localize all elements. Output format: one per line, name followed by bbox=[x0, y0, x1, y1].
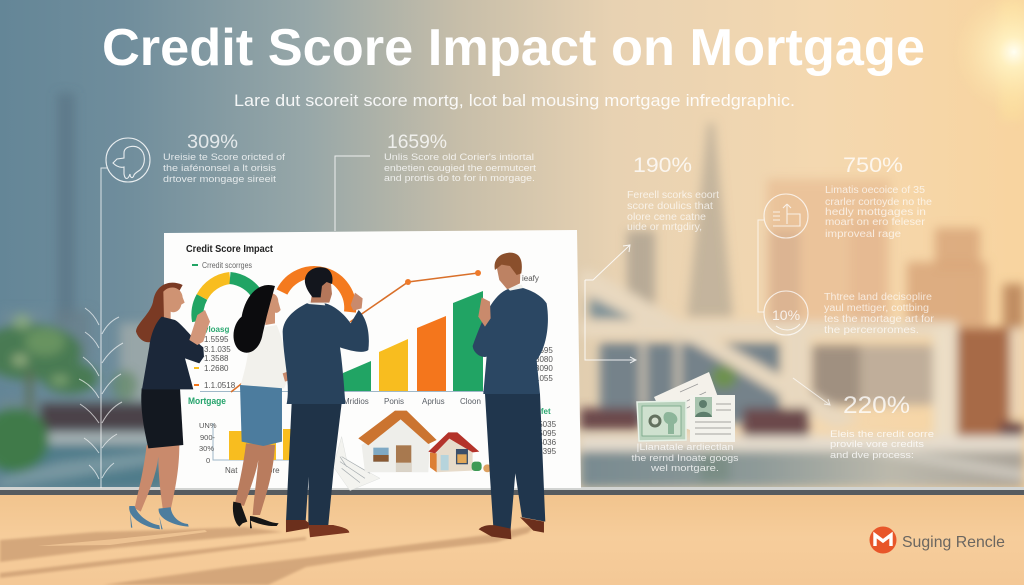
legend: left values: 1.5595 bbox=[204, 335, 229, 344]
icon: 10% circle bbox=[764, 291, 808, 335]
legend: credit scores: Crredit scorrges bbox=[202, 260, 252, 270]
stat: 190%: uide or mrtgdiry, bbox=[627, 222, 702, 233]
legend: right values bbox=[535, 346, 557, 456]
stat: 750%: Limatis oecoice of 35 bbox=[825, 185, 926, 196]
stat: 750%: improveal rage bbox=[825, 229, 902, 240]
icon: documents and cash bbox=[637, 372, 735, 442]
chart: mortgage bars: ore bbox=[268, 466, 280, 475]
jacket bbox=[283, 303, 369, 404]
legs and shoes bbox=[129, 445, 189, 529]
legend: right values: .5036 bbox=[536, 438, 557, 447]
chart labels: ieafy bbox=[522, 274, 539, 283]
text: Three land bbox=[824, 292, 935, 336]
chart labels: Mridios bbox=[343, 397, 369, 406]
face bbox=[163, 287, 185, 319]
panel: whiteboard with charts bbox=[164, 230, 581, 491]
icon: 10% circle: 10% bbox=[772, 307, 800, 323]
stat: 750%: moart on ero feleser bbox=[825, 217, 926, 228]
person: woman in dark jacket bbox=[129, 283, 210, 529]
person: man in navy suit, right bbox=[473, 253, 548, 539]
connector: left timeline with branches bbox=[79, 168, 123, 488]
person: man in navy suit, centre bbox=[283, 267, 369, 537]
hair bbox=[305, 267, 333, 297]
chart: trend line bbox=[231, 270, 481, 392]
subtitle: Lare dut scoreit score mortg, lcot bal mousing mortgage infredgraphic. bbox=[234, 91, 795, 110]
collar bbox=[308, 300, 325, 305]
stat: 220%: and dve process: bbox=[830, 450, 914, 461]
blouse bbox=[241, 325, 290, 388]
text: Three land: yaul mettiger, cottbing bbox=[824, 303, 929, 314]
stat: 1659%: Unlis Score old Corier's intiortal bbox=[384, 152, 534, 163]
stat: 309%: Ureisie te Score oricted of bbox=[163, 152, 285, 163]
skirt bbox=[141, 388, 183, 448]
legs and heels bbox=[233, 443, 279, 528]
trousers and shoes bbox=[479, 393, 545, 539]
legend: right values: .5395 bbox=[536, 447, 557, 456]
icon: head circle bbox=[106, 138, 150, 182]
legend: right values: .5095 bbox=[536, 429, 557, 438]
legend: right values: .5035 bbox=[536, 420, 557, 429]
icon: large house bbox=[358, 411, 437, 472]
title: Credit Score Impact on Mortgage bbox=[102, 19, 925, 77]
legend: right values: ofet bbox=[536, 407, 551, 416]
icons: growth and 10% circles with connector bbox=[758, 194, 808, 335]
legend: left values bbox=[194, 325, 236, 390]
legend: left values: 1.1.0518 bbox=[204, 381, 236, 390]
legend: left values: yloasg bbox=[204, 325, 229, 334]
chart: mortgage bars: UN% bbox=[199, 421, 217, 430]
legend: right values: 3080 bbox=[535, 355, 553, 364]
hands bbox=[189, 310, 210, 345]
chart: mortgage bars: 900- bbox=[200, 433, 216, 442]
caption: documents: wel mortgare. bbox=[650, 463, 719, 474]
legend: left values: 1.2680 bbox=[204, 364, 229, 373]
stat: 190%: Fereell scorks eoort bbox=[627, 190, 719, 201]
icon: growth steps bbox=[764, 194, 808, 238]
jacket bbox=[473, 287, 548, 394]
chart: green yellow gauge bbox=[197, 278, 258, 321]
skirt bbox=[240, 385, 282, 446]
stat: 220%: provile vore credits bbox=[830, 439, 924, 450]
hair bbox=[136, 283, 183, 342]
icon: paper sheet bbox=[333, 437, 380, 491]
hand bbox=[351, 293, 363, 311]
hair bbox=[495, 253, 522, 275]
legend: right values: 5595 bbox=[535, 346, 553, 355]
stat: 1659%: 1659% bbox=[387, 132, 447, 153]
chart labels: Ponis bbox=[384, 397, 404, 406]
stat: 190% bbox=[627, 154, 719, 233]
trousers and shoes bbox=[286, 403, 349, 537]
chart: mortgage bars bbox=[199, 421, 313, 475]
stat: 309% bbox=[106, 132, 285, 185]
stat: 190%: olore cene catne bbox=[627, 212, 707, 223]
face bbox=[265, 293, 281, 325]
arrows from the board to 190% bbox=[585, 245, 636, 363]
stat: 1659%: enbetien cougied the oermutcert bbox=[384, 163, 536, 174]
chart: mortgage bars: Nat bbox=[225, 466, 238, 475]
stat: 190%: score doulics that bbox=[627, 201, 713, 212]
jacket bbox=[142, 317, 204, 389]
stat: 220% bbox=[830, 392, 934, 461]
hand bbox=[478, 297, 491, 327]
legend: right values: 1055 bbox=[535, 374, 553, 383]
stat: 220%: Eleis the credit oorre bbox=[830, 429, 934, 440]
head bbox=[496, 263, 521, 289]
floor with shadows bbox=[0, 487, 1024, 585]
stat: 1659% bbox=[335, 132, 536, 231]
caption: documents: the rernd Inoate googs bbox=[632, 453, 739, 464]
chart: mortgage bars: 0 bbox=[206, 456, 210, 465]
person: woman in white blouse bbox=[233, 285, 292, 528]
collar bbox=[506, 285, 523, 291]
chart: rising bars bbox=[200, 291, 500, 392]
icon: small house bbox=[428, 432, 491, 472]
stat: 750%: 750% bbox=[843, 154, 903, 177]
heading: Mortgage: Mortgage bbox=[188, 396, 226, 406]
legend: right values: 3090 bbox=[535, 364, 553, 373]
hair bbox=[233, 285, 275, 353]
head bbox=[311, 280, 332, 303]
stat: 309%: the iafénonsel a lt orisis bbox=[163, 163, 276, 174]
arrow to 220% bbox=[793, 378, 830, 405]
stat: 309%: drtover mongage sireeit bbox=[163, 174, 276, 185]
chart labels: Aprlus bbox=[422, 397, 445, 406]
text: Three land: Thtree land decisoplire bbox=[824, 292, 933, 303]
legend: left values: 3.1.035 bbox=[204, 345, 231, 354]
stat: 220%: 220% bbox=[843, 392, 910, 419]
logo: Suging Rencle bbox=[870, 526, 1005, 554]
chart labels: Cloon bbox=[460, 397, 481, 406]
chart: orange gauge bbox=[282, 272, 350, 312]
chart: mortgage bars: 30% bbox=[199, 444, 214, 453]
stat: 1659%: and prortis do to for in morgage. bbox=[384, 173, 535, 184]
stat: 750%: crarler cortoyde no the bbox=[825, 197, 933, 208]
chart labels bbox=[343, 274, 539, 406]
legend: left values: 1.3588 bbox=[204, 354, 229, 363]
stat: 309%: 309% bbox=[187, 132, 238, 153]
heading: Credit Score Impact: Credit Score Impact bbox=[186, 243, 273, 255]
text: Three land: the perceroromes. bbox=[824, 325, 919, 336]
text: Three land: tes the mortage art for bbox=[824, 314, 935, 325]
stat: 750% bbox=[825, 154, 933, 240]
logo: Suging Rencle: Suging Rencle bbox=[902, 534, 1005, 551]
stat: 190%: 190% bbox=[633, 154, 692, 177]
caption: documents bbox=[632, 442, 739, 474]
caption: documents: |Lianatale ardiectlan bbox=[636, 442, 734, 453]
stat: 750%: hedly mottgages in bbox=[825, 207, 926, 218]
